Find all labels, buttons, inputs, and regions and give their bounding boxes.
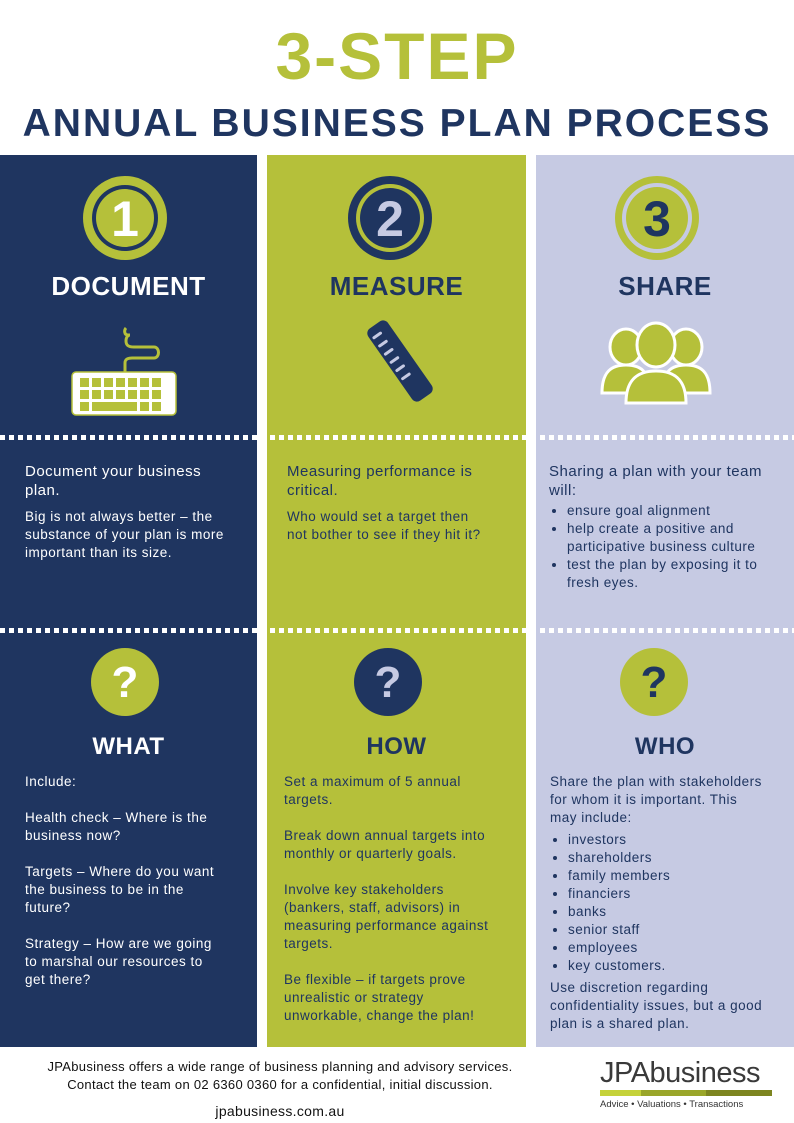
text: who: shareholders [568, 850, 652, 865]
panel: share [536, 155, 794, 1047]
icon: people [600, 322, 712, 404]
footer text: jpabusiness.com.au [215, 1103, 345, 1119]
text: who [550, 774, 762, 1031]
text: share: ensure goal alignment [567, 503, 710, 518]
icon: question: ? [641, 658, 667, 707]
heading: MEASURE: MEASURE [330, 271, 463, 301]
icon: number 1 [83, 176, 167, 260]
icon: question: ? [112, 658, 138, 707]
text: who: investors [568, 832, 627, 847]
logo: Advice • Valuations • Transactions [600, 1099, 743, 1110]
icon: number 2 [348, 176, 432, 260]
footer text: Contact the team on 02 6360 0360 for a confidential, initial discussion. [67, 1077, 493, 1092]
text: document [25, 463, 224, 560]
text: share [549, 463, 762, 590]
text: share: Sharing a plan with your team will: [549, 463, 762, 499]
text: who: family members [568, 868, 670, 883]
icon: question [91, 648, 159, 716]
icon: number 1: 1 [111, 191, 139, 247]
icon: question [354, 648, 422, 716]
icon: number 2: 2 [376, 191, 404, 247]
text: how: Set a maximum of 5 annual targets. [284, 774, 461, 807]
icon: question [620, 648, 688, 716]
heading: DOCUMENT: DOCUMENT [51, 271, 206, 301]
heading: HOW: HOW [366, 733, 427, 760]
text: measure: Who would set a target then not bother to see if they hit it? [287, 509, 481, 542]
logo: JPAbusiness [600, 1057, 760, 1089]
heading: WHAT: WHAT [92, 733, 165, 760]
icon: number 3 [615, 176, 699, 260]
panel: measure [267, 155, 526, 1047]
icon: ruler [367, 320, 433, 402]
text: what [25, 774, 214, 987]
title: ANNUAL BUSINESS PLAN PROCESS [23, 102, 771, 145]
text: share: test the plan by exposing it to fresh eyes. [567, 557, 757, 590]
text: share: help create a positive and participative business culture [567, 521, 755, 554]
heading: WHO: WHO [635, 733, 695, 760]
text: who: Share the plan with stakeholders for whom it is important. This may include: [550, 774, 762, 825]
footer text [48, 1059, 512, 1119]
text: who: banks [568, 904, 607, 919]
text: who: senior staff [568, 922, 640, 937]
title [23, 19, 771, 145]
text: how: Break down annual targets into monthly or quarterly goals. [284, 828, 485, 861]
text: measure: Measuring performance is critical. [287, 463, 472, 499]
icon: number 3: 3 [643, 191, 671, 247]
panel: document [0, 155, 257, 1047]
title: 3-STEP [275, 19, 519, 93]
text: document: Big is not always better – the substance of your plan is more important than its size. [25, 509, 224, 560]
heading: SHARE: SHARE [618, 271, 712, 301]
footer text: JPAbusiness offers a wide range of business planning and advisory services. [48, 1059, 512, 1074]
text: measure [287, 463, 481, 542]
text: document: Document your business plan. [25, 463, 201, 499]
logo [600, 1057, 772, 1110]
icon: keyboard [71, 327, 177, 416]
icon: question: ? [375, 658, 401, 707]
text: what: Strategy – How are we going to marshal our resources to get there? [25, 936, 212, 987]
text: who: financiers [568, 886, 631, 901]
text: what: Health check – Where is the business now? [25, 810, 207, 843]
text: who: employees [568, 940, 638, 955]
text: what: Targets – Where do you want the business to be in the future? [25, 864, 214, 915]
text: who: Use discretion regarding confidentiality issues, but a good plan is a shared plan. [550, 980, 762, 1031]
text: how: Be flexible – if targets prove unrealistic or strategy unworkable, change the plan! [284, 972, 474, 1023]
text: who: key customers. [568, 958, 666, 973]
text: what: Include: [25, 774, 76, 789]
text: how [284, 774, 488, 1023]
text: how: Involve key stakeholders (bankers, staff, advisors) in measuring performance against targets. [284, 882, 488, 951]
